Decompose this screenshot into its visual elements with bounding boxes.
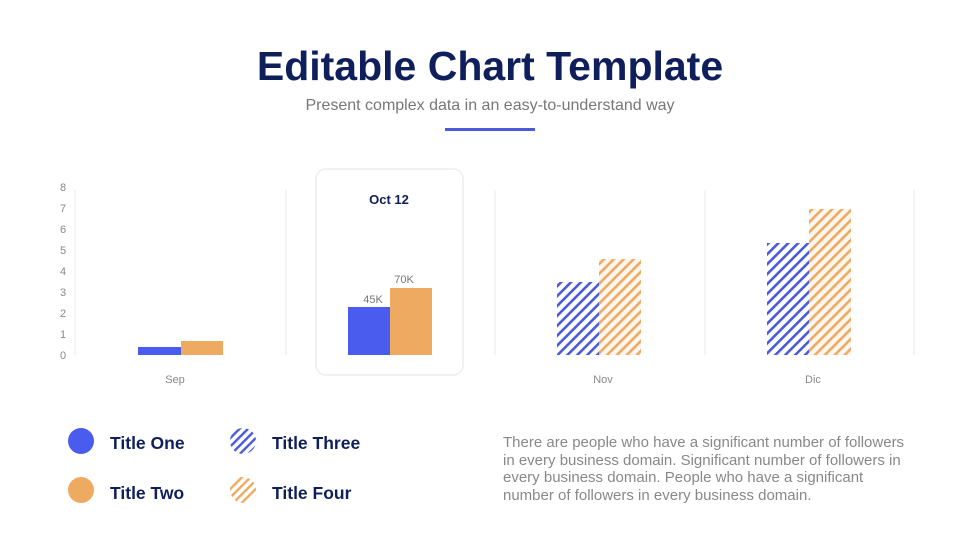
y axis labels: 8 <box>60 182 66 194</box>
description text: every business domain. People who have a significant <box>503 469 863 486</box>
bars: Oct <box>348 274 432 355</box>
bars: Dic <box>767 209 851 355</box>
legend: Title Four <box>272 483 352 503</box>
description text: number of followers in every business domain. <box>503 486 811 504</box>
y axis labels: 5 <box>60 245 66 257</box>
x labels: Dic <box>805 374 821 386</box>
highlight card: Oct 12 <box>316 169 463 375</box>
y axis labels: 1 <box>60 329 66 341</box>
y axis labels: 3 <box>60 287 66 299</box>
x labels: Nov <box>593 374 613 386</box>
bars: Sep <box>138 341 223 355</box>
bars: Nov <box>557 259 641 355</box>
legend: Title Two <box>110 483 184 503</box>
accent underline <box>445 128 535 131</box>
y axis labels: 4 <box>60 266 66 278</box>
description text: in every business domain. Significant number of followers in <box>503 452 901 468</box>
y axis labels <box>60 182 66 362</box>
legend: Title One <box>110 433 185 453</box>
bars: Oct: 45K <box>363 294 383 306</box>
x labels: Sep <box>165 374 185 386</box>
y axis labels: 0 <box>60 350 66 362</box>
y axis labels: 7 <box>60 203 66 215</box>
bars: Oct: 70K <box>394 274 414 286</box>
description text: There are people who have a significant number of followers <box>503 434 904 451</box>
legend: Title Three <box>272 433 360 453</box>
y axis labels: 6 <box>60 224 66 236</box>
description text <box>503 434 904 504</box>
y axis labels: 2 <box>60 308 66 320</box>
highlight card: Oct 12: Oct 12 <box>369 192 409 207</box>
legend <box>68 428 360 503</box>
x labels <box>165 374 821 386</box>
title: Editable Chart Template <box>257 43 723 89</box>
chart <box>60 168 914 386</box>
subtitle: Present complex data in an easy-to-understand way <box>305 97 675 114</box>
